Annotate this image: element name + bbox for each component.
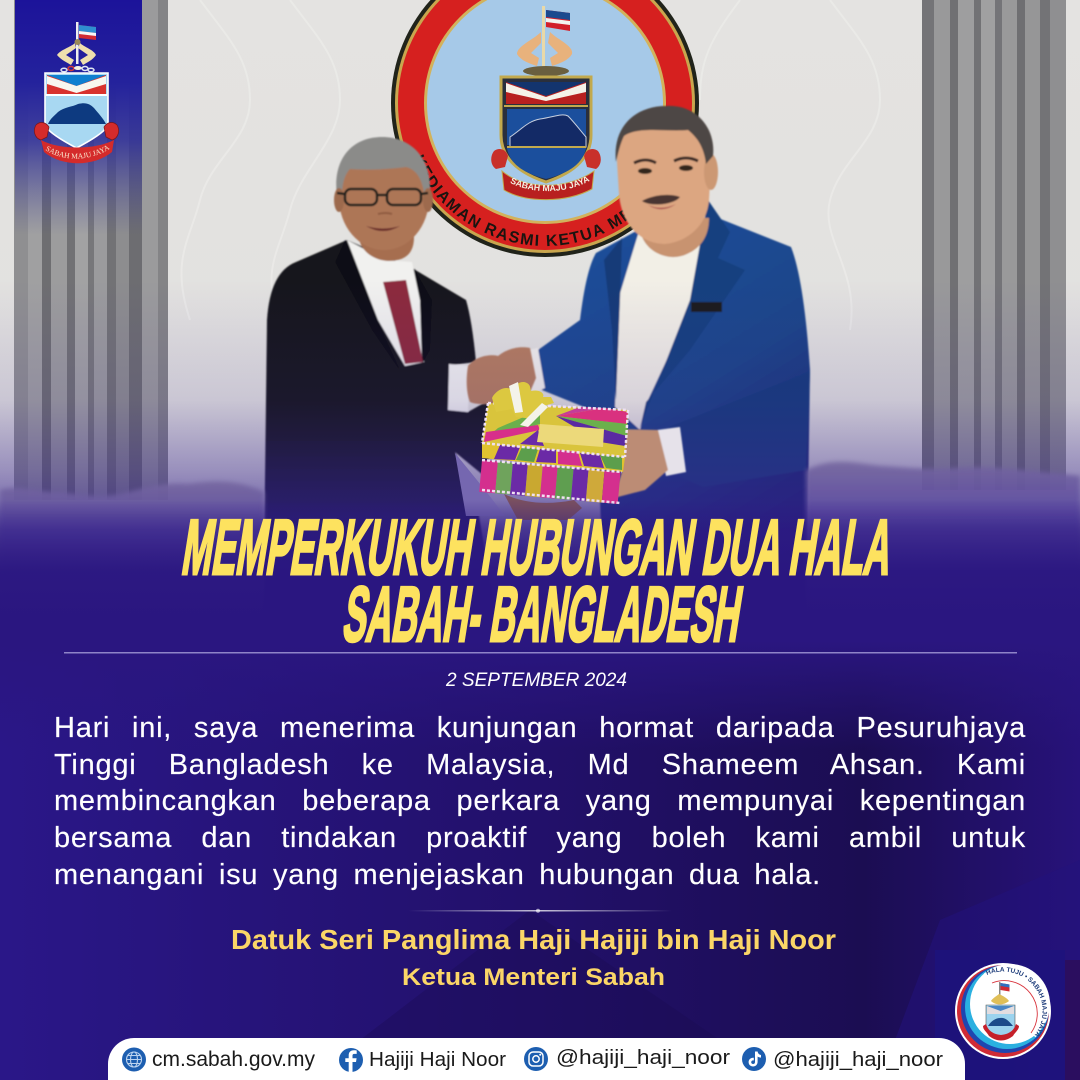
wall emblem: Kediaman Rasmi Ketua Menteri: KEDIAMAN RASMI KETUA MENTERI bbox=[420, 154, 628, 246]
body paragraph: menangani isu yang menjejaskan hubungan dua hala. bbox=[54, 859, 821, 891]
instagram handle: @hajiji_haji_noor bbox=[556, 1047, 730, 1069]
photo: man in black suit bbox=[263, 137, 500, 640]
logo ribbon: SABAH MAJU JAYA bbox=[46, 146, 110, 159]
icon: tiktok bbox=[742, 1047, 766, 1071]
tiktok handle: @hajiji_haji_noor bbox=[773, 1049, 943, 1071]
cloud band on left and right bbox=[0, 462, 1080, 652]
body paragraph: membincangkan beberapa perkara yang mempunyai kepentingan bbox=[54, 785, 1026, 817]
right curtain bbox=[922, 0, 1066, 490]
body paragraph bbox=[54, 712, 1026, 891]
lower panel blend into photo bbox=[0, 500, 1080, 642]
logo shield bbox=[45, 73, 108, 148]
icon: facebook bbox=[339, 1048, 363, 1072]
body paragraph: Hari ini, saya menerima kunjungan hormat daripada Pesuruhjaya bbox=[54, 712, 1026, 744]
logo: Sabah crest top left bbox=[34, 22, 119, 164]
title rule bbox=[64, 652, 1017, 654]
photo: man in blue suit bbox=[528, 106, 810, 640]
photo background: wall bbox=[0, 0, 1080, 640]
body paragraph: bersama dan tindakan proaktif yang boleh kami ambil untuk bbox=[54, 822, 1026, 854]
round badge: Hala Tuju bbox=[955, 963, 1051, 1059]
logo flag and pole bbox=[57, 22, 96, 72]
lower background facets bbox=[360, 860, 1080, 1080]
photo: gift box bbox=[455, 382, 686, 520]
body paragraph: Tinggi Bangladesh ke Malaysia, Md Shameem Ahsan. Kami bbox=[54, 749, 1026, 781]
author name: Datuk Seri Panglima Haji Hajiji bin Haji Noor bbox=[231, 924, 836, 955]
logo ribbon bbox=[34, 122, 119, 164]
icon: globe bbox=[122, 1048, 146, 1072]
wall emblem: Kediaman Rasmi Ketua Menteri bbox=[391, 0, 699, 257]
lower panel shading bbox=[0, 640, 1080, 750]
facebook name: Hajiji Haji Noor bbox=[369, 1049, 506, 1071]
emblem ribbon: SABAH MAJU JAYA bbox=[510, 176, 590, 192]
gift stripes bbox=[479, 460, 620, 504]
overlay: purple photo fade bbox=[0, 280, 1080, 640]
blue banner behind logo bbox=[15, 0, 142, 235]
gift hand below bbox=[504, 494, 582, 520]
holding hand and cuff bbox=[614, 427, 686, 498]
lower purple panel bbox=[0, 640, 1080, 1080]
wall pattern bbox=[181, 0, 880, 330]
handshake bbox=[467, 347, 536, 404]
emblem crest bbox=[501, 6, 591, 182]
social footer pill bbox=[108, 1038, 965, 1080]
badge crest bbox=[983, 982, 1019, 1040]
icon: instagram bbox=[524, 1047, 548, 1071]
round badge: Hala Tuju: HALA TUJU • SABAH MAJU JAYA bbox=[986, 967, 1048, 1036]
date: 2 SEPTEMBER 2024 bbox=[445, 670, 627, 691]
emblem ribbon bbox=[491, 149, 601, 200]
lavender gap bbox=[455, 453, 505, 516]
divider bbox=[408, 909, 672, 913]
author role: Ketua Menteri Sabah bbox=[402, 964, 665, 991]
title bbox=[177, 503, 899, 658]
left curtain bbox=[14, 0, 168, 500]
website: cm.sabah.gov.my bbox=[152, 1048, 315, 1071]
